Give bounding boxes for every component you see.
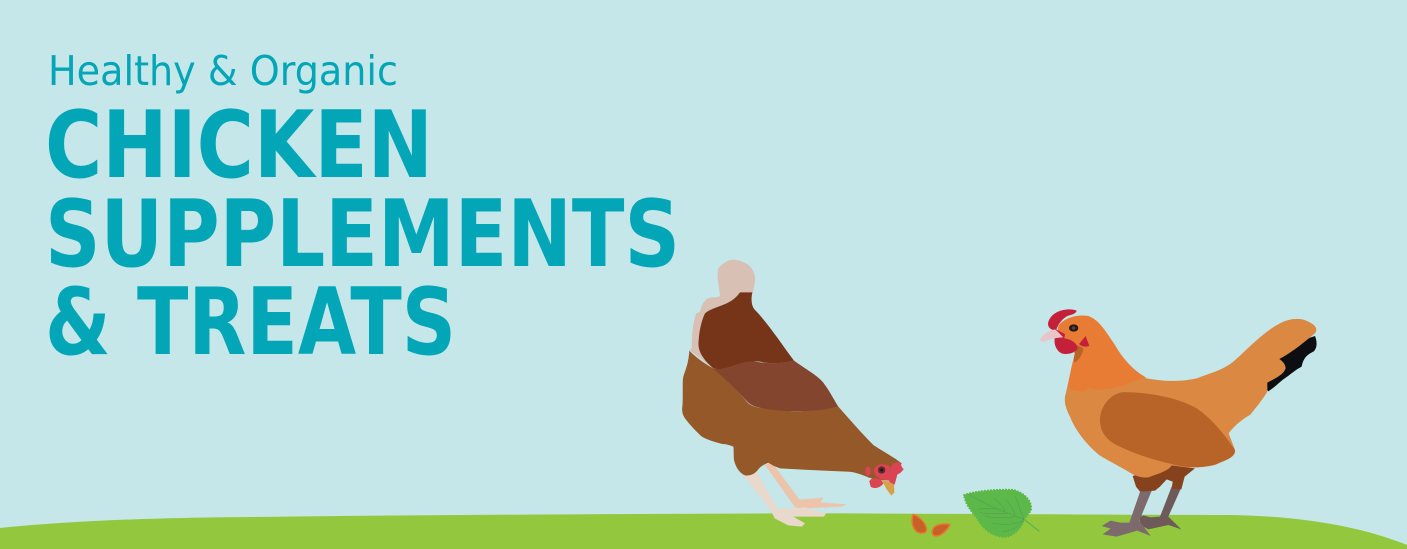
illustration: standing rooster — [1040, 309, 1317, 537]
hen head — [865, 462, 904, 496]
rooster ear — [1079, 336, 1089, 347]
seed right — [932, 524, 950, 536]
heading line: treats: & TREATS — [45, 268, 456, 376]
rooster eye — [1069, 324, 1078, 332]
rooster neck and head — [1057, 316, 1147, 392]
hen ear — [865, 467, 871, 476]
title block — [45, 47, 680, 376]
hen beak — [882, 480, 894, 496]
seeds — [912, 514, 950, 536]
hen comb — [889, 462, 904, 485]
leaf — [964, 490, 1039, 537]
hen eye — [878, 466, 885, 474]
rooster comb — [1048, 309, 1077, 331]
rooster tail feather: black — [1262, 336, 1317, 391]
leaf blade — [964, 490, 1031, 537]
heading line: chicken: CHICKEN — [45, 91, 433, 199]
hen tail plume — [689, 260, 755, 369]
hen back leg — [765, 462, 847, 509]
seed left — [912, 514, 927, 533]
illustration: pecking hen — [682, 260, 904, 527]
rooster back leg — [1139, 487, 1182, 529]
hen front leg — [743, 472, 826, 527]
hen wattle — [869, 478, 883, 488]
hen face — [874, 464, 891, 481]
subtitle: Healthy & Organic — [48, 47, 398, 95]
leaf stem — [1024, 519, 1039, 531]
ground: green hill — [0, 513, 1407, 549]
rooster wing — [1100, 392, 1235, 467]
rooster body — [1065, 319, 1316, 478]
hen wing: upper feathers — [698, 292, 794, 369]
hen body — [682, 351, 902, 480]
rooster neck shadow — [1074, 345, 1083, 363]
rooster wattle — [1055, 329, 1078, 354]
rooster thighs — [1133, 465, 1195, 492]
rooster front leg — [1102, 490, 1152, 537]
leaf veins — [968, 494, 1024, 532]
rooster beak — [1040, 329, 1063, 342]
hen wing: lower feathers — [713, 361, 838, 411]
heading line: supplements: SUPPLEMENTS — [45, 180, 680, 288]
